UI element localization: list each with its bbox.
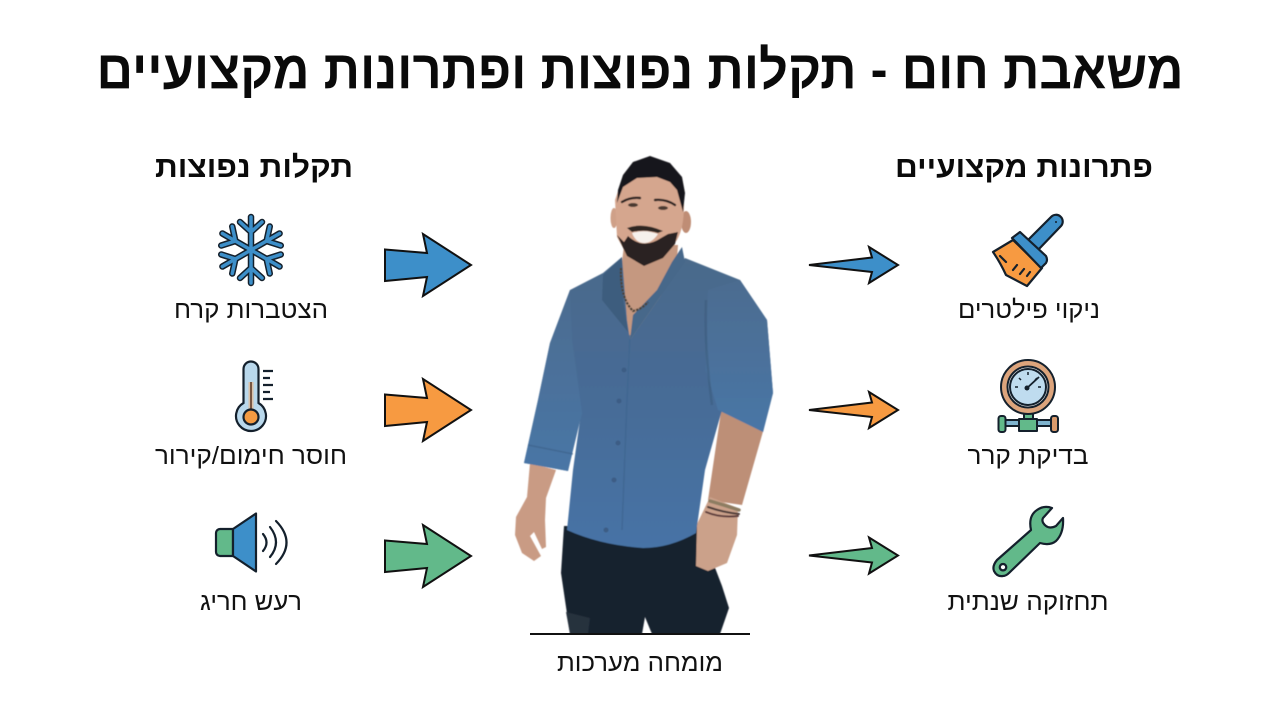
placket and buttons — [622, 335, 630, 530]
label: ice buildup: הצטברות קרח — [174, 296, 328, 324]
trousers — [561, 526, 729, 634]
collar — [630, 247, 685, 340]
hair — [617, 156, 685, 212]
floor line — [530, 633, 750, 635]
arrow: orange output — [809, 392, 898, 428]
right sleeve — [706, 280, 773, 432]
mouth — [632, 231, 658, 243]
necklace — [621, 268, 648, 311]
icon: snowflake — [217, 217, 285, 283]
right hand — [696, 497, 738, 571]
icon: brush — [993, 215, 1063, 286]
icon: thermometer — [236, 362, 273, 431]
icon: wrench — [993, 507, 1063, 576]
label: filter cleaning: ניקוי פילטרים — [958, 296, 1100, 324]
label: refrigerant check: בדיקת קרר — [968, 442, 1089, 470]
icon: speaker — [216, 514, 286, 572]
neck — [620, 245, 678, 348]
moustache — [627, 226, 663, 233]
label: annual maintenance: תחזוקה שנתית — [948, 588, 1108, 616]
arrow: blue output — [809, 247, 898, 283]
heading: common faults: תקלות נפוצות — [155, 151, 353, 184]
label: lack of heating or cooling: חוסר חימום/קירור — [155, 442, 347, 470]
arrow: green output — [809, 538, 898, 574]
person: technician — [515, 156, 773, 634]
title: משאבת חום - תקלות נפוצות ופתרונות מקצועיים — [96, 40, 1184, 100]
eyes — [622, 198, 675, 205]
face — [615, 170, 684, 265]
arrow: green input — [385, 525, 471, 587]
heading: professional solutions: פתרונות מקצועיים — [895, 151, 1153, 184]
arrow: orange input — [385, 379, 471, 441]
left sleeve — [524, 290, 582, 471]
label: systems expert: מומחה מערכות — [557, 649, 723, 677]
ears — [610, 208, 618, 228]
icon: pressure gauge — [998, 360, 1058, 432]
beard — [617, 232, 678, 266]
shirt body — [524, 257, 773, 548]
bracelets — [706, 501, 739, 516]
right forearm — [708, 405, 764, 505]
left forearm and hand — [515, 463, 556, 561]
arrow: blue input — [385, 234, 471, 296]
label: unusual noise: רעש חריג — [200, 588, 302, 616]
